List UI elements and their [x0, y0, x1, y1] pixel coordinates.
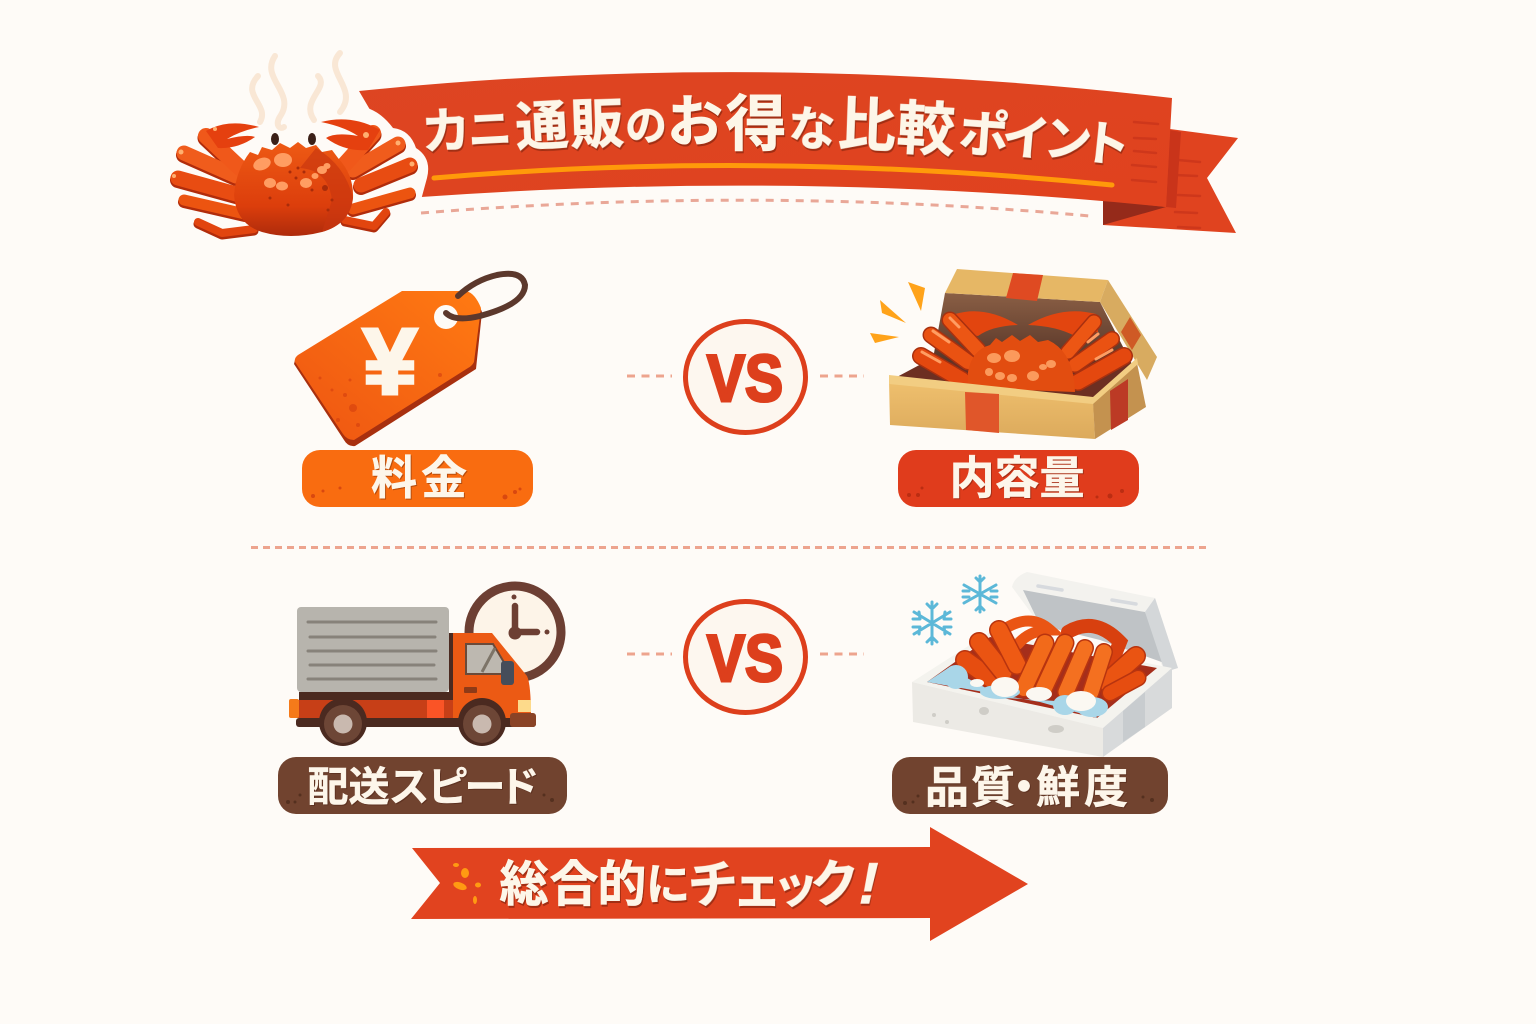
leg highlights: [922, 318, 1112, 362]
vs connector right row 2: [820, 652, 864, 656]
box base: [889, 380, 1095, 439]
cab window: [466, 644, 511, 674]
title text: イ: [1000, 111, 1052, 167]
label: quality and freshness: 鮮: [1036, 764, 1080, 812]
snowflakes: [913, 576, 997, 644]
title text: ニ: [467, 104, 513, 156]
title text: 通: [514, 96, 570, 158]
steam wisps: [252, 53, 346, 128]
call to action text: 合: [549, 858, 599, 912]
title text: ポ: [957, 105, 1011, 165]
icon: crab: [172, 119, 414, 236]
call to action text: に: [646, 860, 690, 910]
yen symbol: ¥: [363, 309, 417, 414]
door handle: [464, 687, 477, 693]
crab claws: [206, 123, 259, 148]
foam base rim and interior: [912, 632, 1172, 728]
call to action text: ク: [808, 854, 862, 914]
bottom arrow banner: [411, 827, 1028, 941]
title text: 販: [569, 94, 625, 156]
title text: 比: [837, 93, 897, 159]
cargo box: [297, 607, 449, 692]
title ribbon banner: [359, 72, 1238, 233]
label: quality and freshness: 品: [925, 764, 969, 812]
wheels: [319, 698, 506, 746]
snow: [970, 677, 1096, 711]
label: delivery speed: [278, 757, 567, 814]
call to action text: [499, 852, 886, 916]
box inner: [895, 362, 1137, 402]
vs badge row 2: [686, 602, 806, 712]
arrow shape: [411, 827, 1028, 941]
label: quality and freshness: 質: [971, 764, 1015, 812]
dashed line under ribbon: [421, 200, 1090, 216]
crab shell spots: [251, 153, 330, 190]
foam lid: [1012, 572, 1178, 672]
call to action text: チ: [686, 855, 740, 915]
orange sparks: [452, 863, 481, 904]
crab shell speckles: [268, 166, 334, 212]
call to action text: 的: [597, 858, 647, 912]
label: quality and freshness: 度: [1084, 764, 1128, 812]
tag string: [446, 274, 525, 318]
label: quality and freshness: ・: [1002, 764, 1046, 812]
title text: な: [788, 102, 836, 156]
crab halo cut into ribbon: [300, 100, 428, 240]
crab legs: [965, 621, 1138, 693]
icon: kraft gift box with crab: [870, 269, 1157, 439]
ribbon underline: [434, 166, 1112, 185]
title text: [420, 90, 1133, 174]
vs badge row 1: VS: [707, 341, 783, 415]
call to action text: !: [853, 852, 886, 916]
spark marks: [870, 282, 925, 343]
vs connector left row 2: [627, 652, 672, 656]
label: delivery speed: ス: [388, 764, 430, 810]
label: delivery speed: ー: [464, 764, 506, 810]
box lid: [930, 293, 1140, 380]
ribbon tail: [1103, 129, 1238, 233]
icon: delivery truck with clock: [289, 586, 561, 746]
title text: ン: [1042, 113, 1094, 169]
title text: お: [667, 90, 723, 154]
call to action text: 総: [499, 858, 549, 912]
crab eyes: [271, 133, 316, 145]
vs badge row 2: VS: [707, 621, 783, 695]
icon: foam box with crab legs: [912, 572, 1178, 757]
label: delivery speed: 送: [348, 764, 390, 810]
ribbon main band: [359, 72, 1172, 207]
call to action text: ッ: [771, 858, 821, 914]
tag texture: [318, 373, 442, 427]
label: contents: 容: [994, 452, 1040, 504]
crab legs: [178, 133, 410, 233]
label: price: 金: [421, 452, 467, 504]
crushed ice: [927, 665, 1108, 718]
title text: 較: [895, 96, 957, 164]
tag hole: [434, 305, 458, 329]
row 1: price tag: [294, 274, 525, 446]
vs connector left row 1: [627, 374, 672, 378]
label: contents: 内: [949, 452, 995, 504]
label: contents: 量: [1039, 452, 1085, 504]
label: delivery speed: 配: [308, 764, 348, 810]
label: price: [302, 450, 533, 507]
crab shell: [234, 142, 353, 236]
side mirror: [501, 661, 514, 685]
title text: ト: [1079, 116, 1133, 174]
label: price: 料: [371, 452, 417, 504]
crab in box: [921, 311, 1124, 392]
label: contents: [898, 450, 1139, 507]
vs badge row 1: [686, 322, 806, 432]
icon: tag body: [294, 294, 482, 446]
clock: [469, 586, 561, 678]
label: quality and freshness: [892, 757, 1168, 814]
label: delivery speed: ド: [498, 764, 540, 810]
foam front face: [912, 682, 1103, 757]
title text: の: [624, 102, 668, 150]
cab: [453, 633, 531, 718]
headlight: [518, 700, 531, 712]
crab legs shadow: [178, 135, 410, 235]
title text: カ: [420, 104, 472, 160]
chassis: [299, 633, 455, 710]
label: delivery speed: ピ: [428, 764, 468, 810]
title text: 得: [725, 90, 787, 158]
leg highlights: [172, 127, 414, 178]
call to action text: ェ: [732, 859, 782, 915]
vs connector right row 1: [820, 374, 864, 378]
